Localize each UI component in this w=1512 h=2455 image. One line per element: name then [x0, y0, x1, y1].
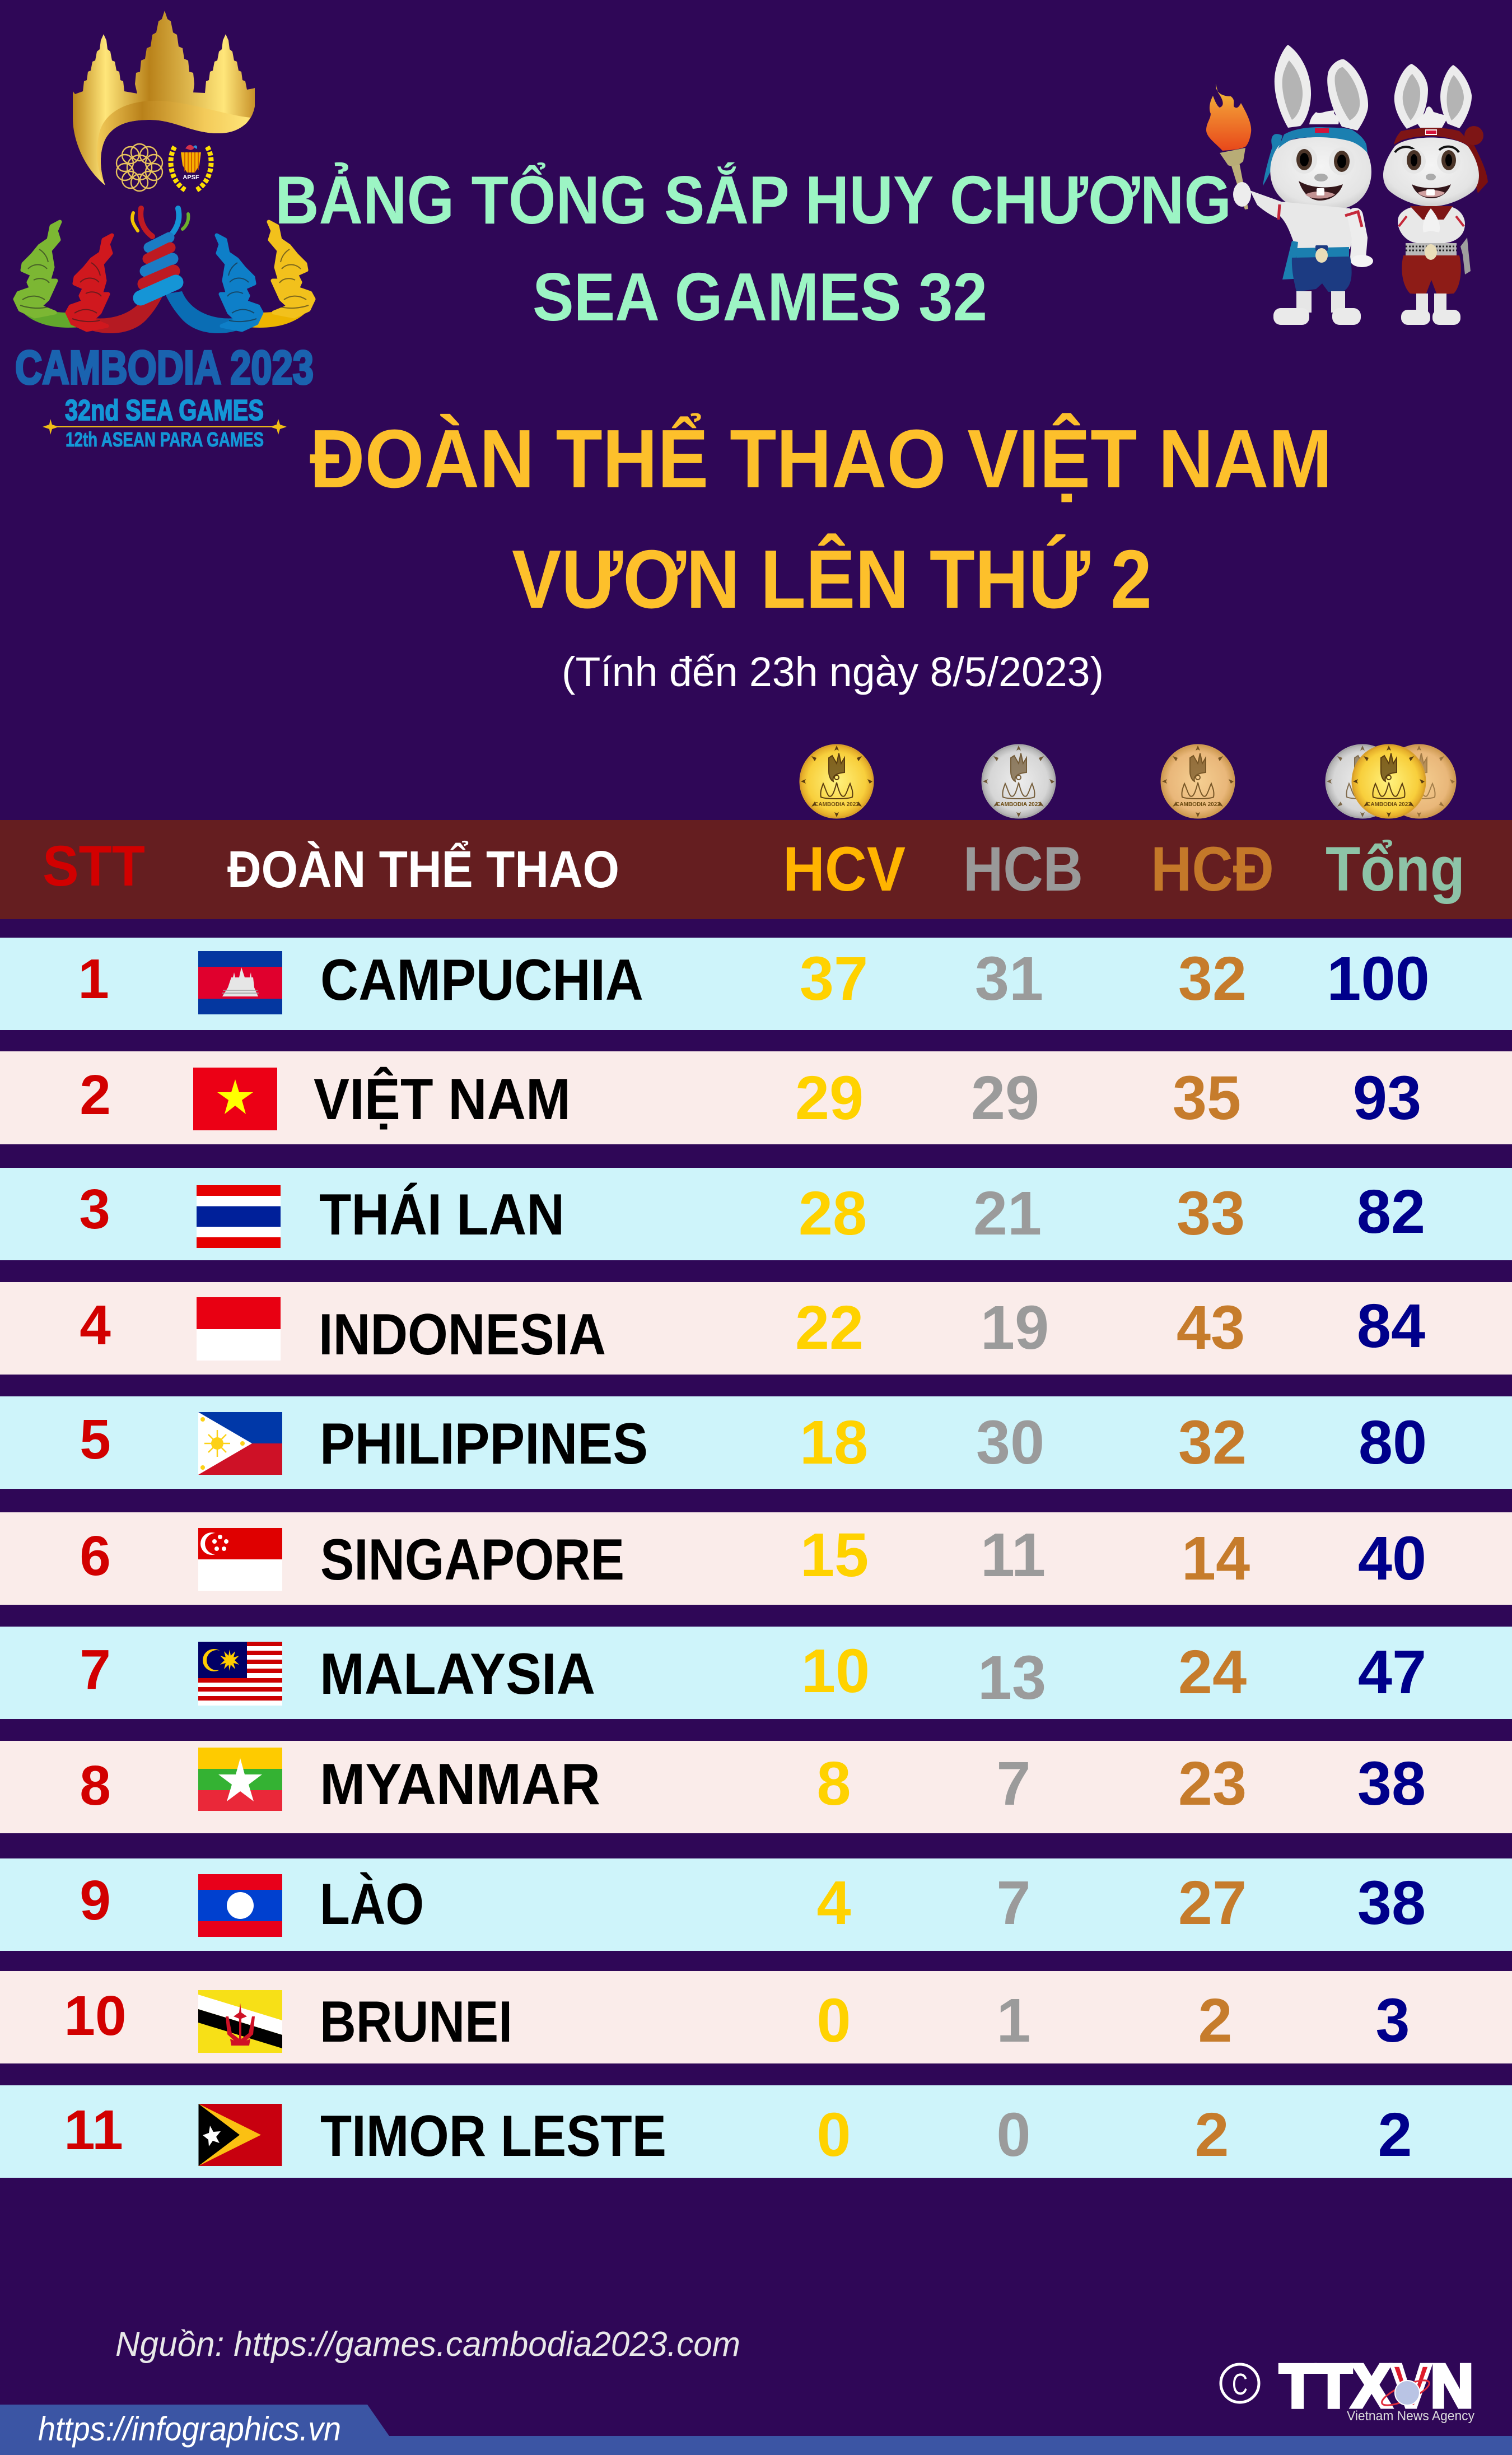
row 1: Campuchia: 37 [800, 944, 868, 1013]
table header band: HCB [963, 834, 1083, 904]
text: 12th ASEAN PARA GAMES: 12th ASEAN PARA GAMES [66, 428, 264, 451]
table header band: ĐOÀN THỂ THAO [227, 840, 619, 898]
mascot: boy rabbit [1233, 45, 1373, 325]
subtitle: date: (Tính đến 23h ngày 8/5/2023) [562, 649, 1104, 695]
row 7: Malaysia: 7 [80, 1638, 111, 1701]
row 3: Thái Lan: 3 [79, 1178, 110, 1241]
icon: SEA Games flower emblem [116, 144, 162, 191]
icon: green naga [15, 222, 80, 328]
row 5: Philippines: 5 [80, 1408, 111, 1471]
flag: Indonesia [197, 1297, 281, 1361]
row 10: Brunei: 10 [64, 1985, 127, 2047]
icon: yellow naga [249, 222, 314, 328]
title: mint heading: SEA GAMES 32 [533, 259, 987, 335]
row 11: Timor Leste: 0 [816, 2100, 851, 2169]
row 2: Việt Nam: 93 [1353, 1064, 1421, 1133]
row 6: Singapore: 11 [981, 1521, 1046, 1590]
row 5: Philippines [0, 1396, 1512, 1489]
row 10: Brunei [0, 1971, 1512, 2063]
row 3: Thái Lan: 82 [1357, 1177, 1425, 1246]
row 8: Myanmar: 38 [1357, 1749, 1426, 1818]
icon: torch [1206, 84, 1251, 209]
table header band: Tổng [1326, 834, 1465, 904]
title: gold headline: ĐOÀN THỂ THAO VIỆT NAM [310, 413, 1332, 505]
row 9: Lào [0, 1858, 1512, 1951]
row 9: Lào: 9 [80, 1869, 111, 1932]
row 6: Singapore: SINGAPORE [320, 1527, 624, 1592]
row 11: Timor Leste: 2 [1378, 2100, 1412, 2169]
row 6: Singapore: 40 [1358, 1524, 1426, 1593]
flag: Laos [198, 1874, 282, 1937]
text: TTXVN: TTXVN [1280, 2352, 1473, 2420]
row 10: Brunei: BRUNEI [320, 1990, 512, 2055]
row 10: Brunei: 3 [1375, 1986, 1410, 2055]
flag: Myanmar [198, 1748, 282, 1811]
icon: copyright: C [1232, 2368, 1248, 2401]
row 8: Myanmar: MYANMAR [320, 1752, 600, 1817]
flag: Timor Leste [198, 2104, 282, 2166]
row 2: Việt Nam: VIỆT NAM [314, 1067, 571, 1132]
row 4: Indonesia [0, 1282, 1512, 1375]
title: mint heading: BẢNG TỔNG SẮP HUY CHƯƠNG [275, 161, 1231, 238]
row 10: Brunei: 0 [816, 1986, 851, 2055]
row 9: Lào: 4 [816, 1869, 851, 1937]
icon: silver medal [982, 745, 1055, 818]
row 4: Indonesia: 43 [1177, 1293, 1245, 1362]
row 3: Thái Lan: 21 [973, 1179, 1042, 1248]
icon: gold medal: CAMBODIA 2023 [814, 802, 859, 808]
row 8: Myanmar [0, 1741, 1512, 1833]
row 7: Malaysia: 47 [1358, 1638, 1426, 1707]
row 4: Indonesia: 4 [80, 1294, 111, 1357]
flag: Vietnam [193, 1068, 277, 1130]
row 5: Philippines: 18 [800, 1408, 868, 1477]
text: Vietnam News Agency: Vietnam News Agency [1347, 2409, 1474, 2424]
icon: gold medal [800, 745, 873, 818]
title: gold headline [310, 413, 1332, 626]
row 7: Malaysia: MALAYSIA [320, 1642, 595, 1707]
icon: total medals [1326, 745, 1455, 818]
TTXVN logo [1221, 2352, 1474, 2424]
row 8: Myanmar: 7 [996, 1749, 1031, 1818]
row 5: Philippines: 30 [976, 1408, 1044, 1477]
row 10: Brunei: 1 [996, 1986, 1031, 2055]
row 4: Indonesia: 19 [981, 1293, 1049, 1362]
row 9: Lào: LÀO [320, 1872, 424, 1937]
row 11: Timor Leste [0, 2085, 1512, 2178]
text: CAMBODIA 2023: CAMBODIA 2023 [15, 341, 314, 394]
row 3: Thái Lan: THÁI LAN [319, 1182, 564, 1247]
row 1: Campuchia: 32 [1178, 944, 1247, 1013]
flag: Singapore [198, 1528, 282, 1591]
table header band: HCV [783, 834, 906, 904]
row 6: Singapore: 6 [80, 1525, 111, 1587]
row 5: Philippines: 80 [1359, 1408, 1427, 1477]
title: mint heading [275, 161, 1231, 335]
row 6: Singapore: 15 [800, 1521, 869, 1590]
row 7: Malaysia: 13 [978, 1643, 1046, 1712]
icon: bronze medal: CAMBODIA 2023 [1175, 802, 1220, 808]
row 11: Timor Leste: 2 [1194, 2100, 1229, 2169]
icon: silver medal: CAMBODIA 2023 [996, 802, 1041, 808]
row 1: Campuchia [0, 938, 1512, 1030]
icon: APSF wreath emblem: APSF [183, 174, 199, 181]
source note: Nguồn: https://games.cambodia2023.com [115, 2325, 740, 2364]
row 9: Lào: 38 [1357, 1869, 1426, 1937]
row 2: Việt Nam: 29 [795, 1064, 864, 1133]
row 10: Brunei: 2 [1198, 1986, 1233, 2055]
table header band: STT [43, 834, 145, 898]
footer bar with website: https://infographics.vn [38, 2410, 341, 2448]
row 3: Thái Lan: 28 [799, 1179, 867, 1248]
icon: globe with orbit [1379, 2375, 1432, 2410]
row 3: Thái Lan [0, 1168, 1512, 1260]
row 6: Singapore [0, 1512, 1512, 1605]
flag: Cambodia [198, 951, 282, 1014]
icon: red naga [67, 235, 164, 333]
row 11: Timor Leste: 0 [996, 2100, 1031, 2169]
row 8: Myanmar: 8 [816, 1749, 851, 1818]
row 1: Campuchia: 31 [975, 944, 1043, 1013]
row 2: Việt Nam: 35 [1173, 1064, 1241, 1133]
row 4: Indonesia: INDONESIA [319, 1302, 606, 1367]
row 9: Lào: 27 [1178, 1869, 1247, 1937]
mascots [1206, 45, 1488, 325]
flag: Brunei [198, 1990, 282, 2053]
row 4: Indonesia: 22 [795, 1293, 864, 1362]
flag: Malaysia [198, 1642, 282, 1706]
row 4: Indonesia: 84 [1357, 1292, 1425, 1361]
row 2: Việt Nam: 29 [971, 1064, 1039, 1133]
icon: blue naga [165, 235, 262, 333]
sparkle divider [43, 419, 287, 435]
row 7: Malaysia: 24 [1178, 1638, 1247, 1707]
table header band: HCĐ [1151, 834, 1274, 904]
mascot: girl rabbit [1383, 64, 1488, 325]
row 7: Malaysia: 10 [801, 1637, 870, 1706]
title: gold headline: VƯƠN LÊN THỨ 2 [512, 533, 1152, 626]
icon: bronze medal [1161, 745, 1234, 818]
icon: copyright [1221, 2364, 1259, 2402]
row 5: Philippines: 32 [1178, 1408, 1247, 1477]
row 11: Timor Leste: TIMOR LESTE [320, 2104, 666, 2169]
row 6: Singapore: 14 [1182, 1524, 1250, 1593]
row 8: Myanmar: 23 [1178, 1749, 1247, 1818]
row 2: Việt Nam [0, 1051, 1512, 1144]
table header band [0, 820, 1512, 919]
icon: APSF wreath emblem [171, 145, 211, 190]
icon: total medals: CAMBODIA 2023 [1366, 802, 1411, 808]
icon: golden crown [73, 11, 255, 185]
row 9: Lào: 7 [996, 1869, 1031, 1937]
logo: Cambodia 2023 SEA Games [15, 11, 314, 451]
flag: Thailand [197, 1185, 281, 1248]
row 3: Thái Lan: 33 [1177, 1179, 1245, 1248]
text: 32nd SEA GAMES: 32nd SEA GAMES [65, 394, 264, 427]
row 7: Malaysia [0, 1627, 1512, 1719]
footer bar with website [0, 2405, 1512, 2455]
row 1: Campuchia: 100 [1327, 944, 1430, 1013]
row 1: Campuchia: CAMPUCHIA [320, 948, 643, 1013]
row 8: Myanmar: 8 [80, 1754, 111, 1817]
row 5: Philippines: PHILIPPINES [320, 1411, 648, 1476]
flag: Philippines [198, 1412, 282, 1475]
row 1: Campuchia: 1 [78, 948, 109, 1010]
row 2: Việt Nam: 2 [80, 1064, 111, 1126]
icon: knot with flame tips [132, 208, 188, 298]
row 11: Timor Leste: 11 [64, 2099, 123, 2161]
